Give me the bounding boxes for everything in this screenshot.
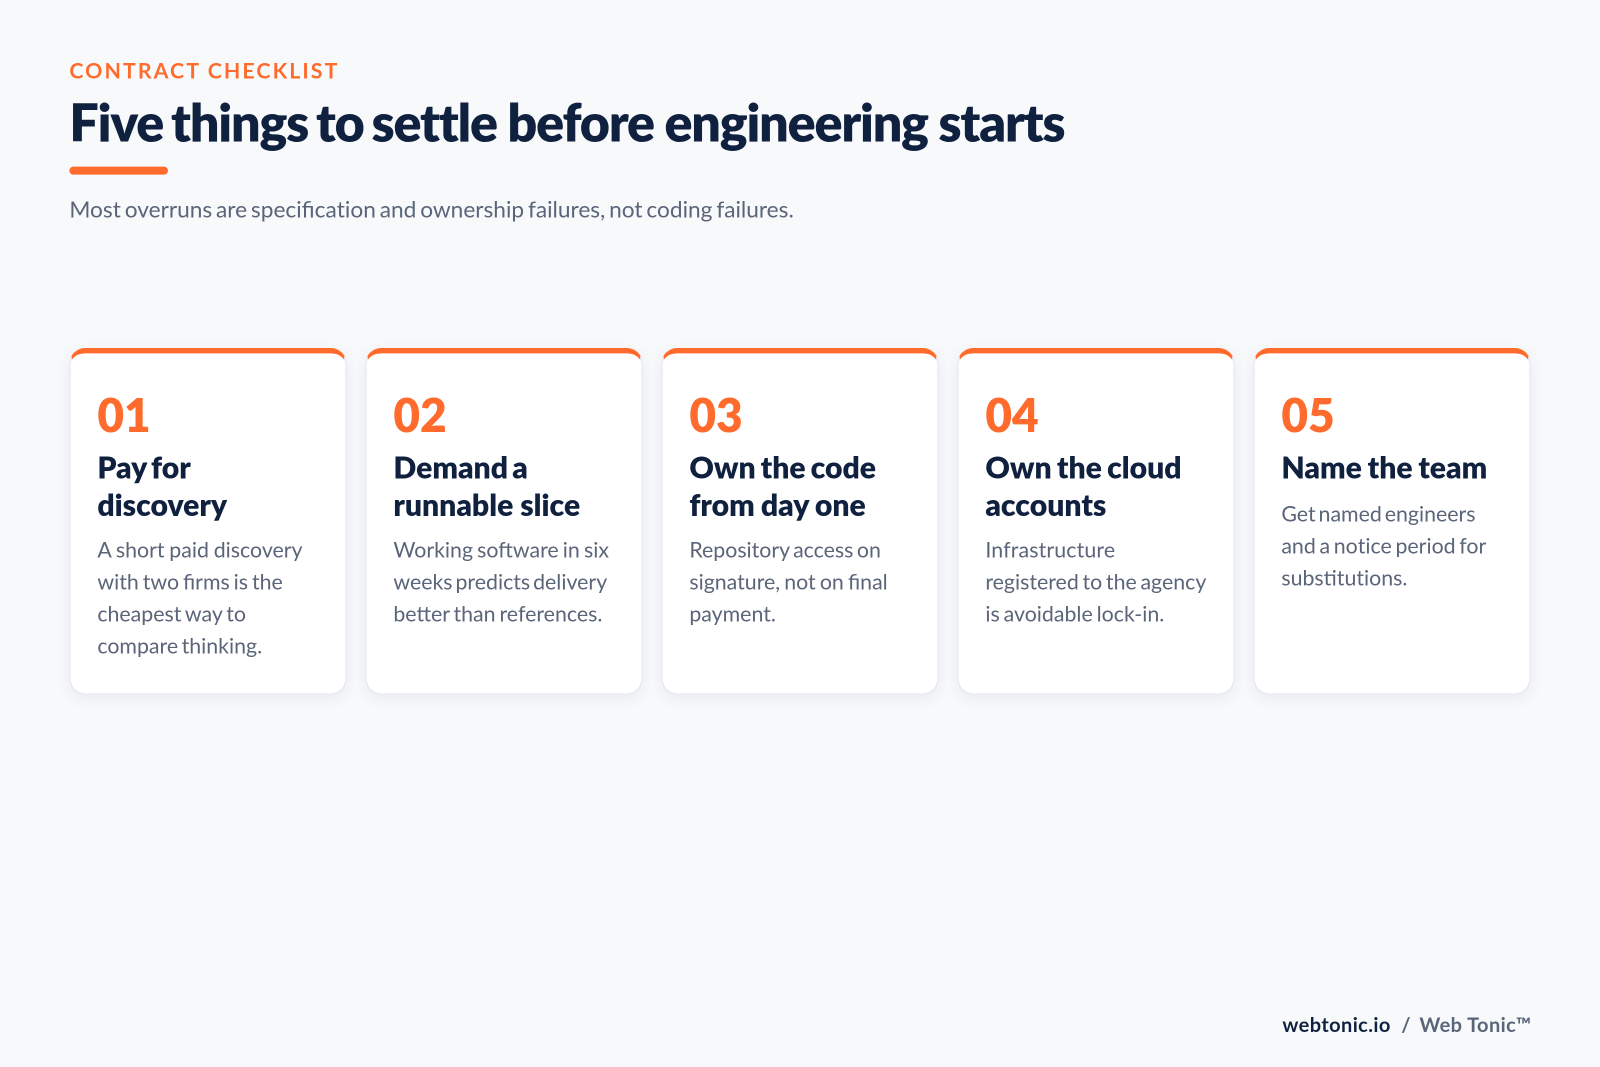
title: Five things to settle before engineering starts [69, 91, 1064, 153]
card 4 number: 04 [985, 387, 1039, 442]
card 2 heading [393, 449, 580, 523]
card 4 body: Infrastructure [985, 537, 1115, 562]
card 4 body: is avoidable lock-in. [985, 601, 1164, 626]
card 2 body: Working software in six [393, 537, 609, 562]
card 1 heading [97, 449, 228, 523]
card 3 [661, 348, 938, 694]
card 3 body: payment. [689, 601, 776, 626]
card 1 [69, 348, 346, 694]
card 5 heading: Name the team [1281, 449, 1487, 485]
card 1 body: A short paid discovery [97, 537, 303, 562]
card 5 [1253, 348, 1530, 694]
card 2 heading: runnable slice [393, 487, 580, 523]
card 2 body: better than references. [393, 601, 602, 626]
card 5 body [1281, 501, 1486, 590]
card 5 number: 05 [1281, 387, 1335, 442]
card 4 heading: accounts [985, 487, 1106, 523]
card 3 heading: from day one [689, 487, 866, 523]
subtitle: Most overruns are specification and ownership failures, not coding failures. [69, 195, 794, 223]
card 2 body [393, 537, 609, 626]
card 1 body: cheapest way to [97, 601, 246, 626]
card 4 heading: Own the cloud [985, 449, 1182, 485]
eyebrow label: CONTRACT CHECKLIST [69, 58, 339, 83]
footer brand: webtonic.io / Web Tonic™ [1282, 1013, 1531, 1037]
card 1 body [97, 537, 303, 658]
card 2 number: 02 [393, 387, 447, 442]
title underline accent [69, 166, 168, 174]
card 4 heading [985, 449, 1182, 523]
card 4 body: registered to the agency [985, 569, 1206, 594]
card 1 number: 01 [97, 387, 151, 442]
card 5 body: and a notice period for [1281, 533, 1486, 558]
card 3 heading: Own the code [689, 449, 876, 485]
card 5 body: Get named engineers [1281, 501, 1475, 526]
card 3 body [689, 537, 888, 626]
card 1 heading: Pay for [97, 449, 191, 485]
card 1 body: compare thinking. [97, 633, 262, 658]
card 5 body: substitutions. [1281, 565, 1407, 590]
card 3 heading [689, 449, 876, 523]
card 3 body: signature, not on final [689, 569, 888, 594]
card 1 body: with two firms is the [97, 569, 283, 594]
card 2 body: weeks predicts delivery [393, 569, 607, 594]
card 4 [957, 348, 1234, 694]
card 2 heading: Demand a [393, 449, 528, 485]
card 3 number: 03 [689, 387, 743, 442]
card 2 [365, 348, 642, 694]
card 1 heading: discovery [97, 487, 227, 523]
card 3 body: Repository access on [689, 537, 881, 562]
card 4 body [985, 537, 1206, 626]
